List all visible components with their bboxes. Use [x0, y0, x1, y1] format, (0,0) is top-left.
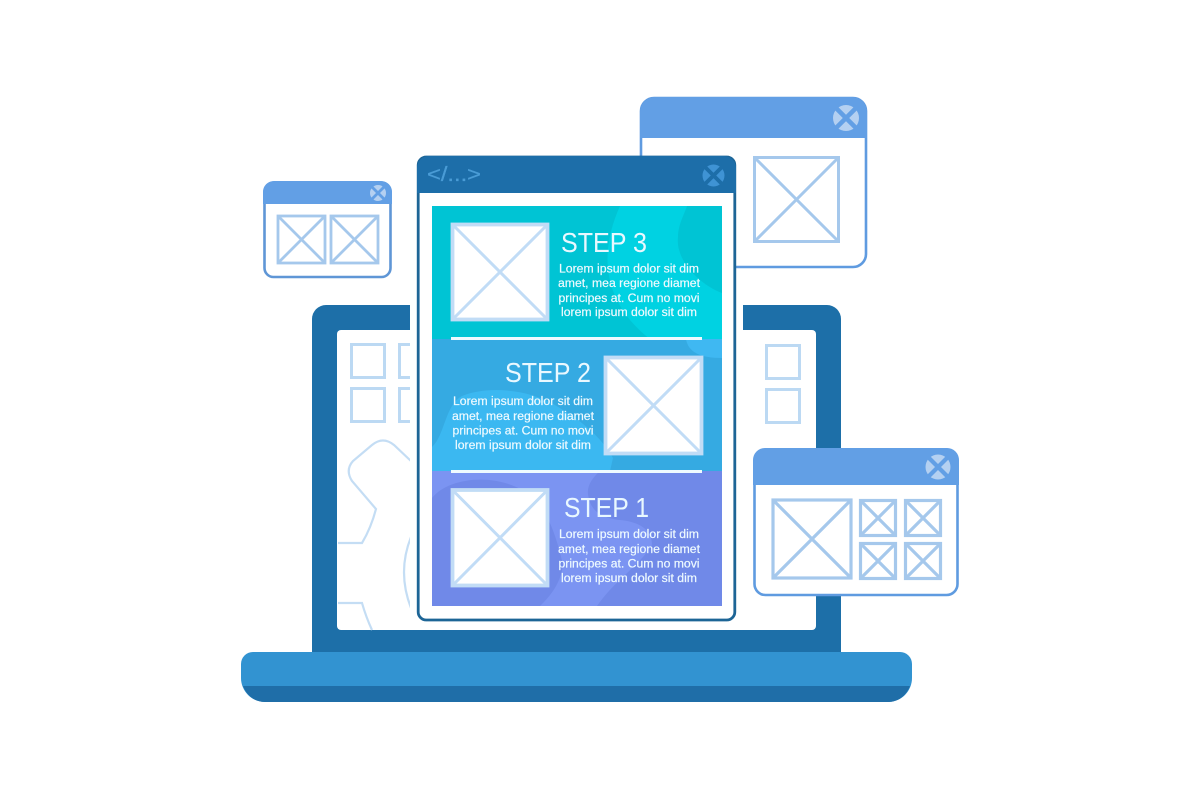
panel shade left	[432, 480, 563, 606]
text block: principes at. Cum no movi	[452, 424, 594, 438]
text block: lorem ipsum dolor sit dim	[561, 305, 697, 319]
laptop	[241, 305, 912, 702]
heading: STEP 3	[561, 227, 647, 258]
white halo	[410, 300, 743, 630]
text block: Lorem ipsum dolor sit dim	[559, 527, 699, 541]
image placeholder	[452, 490, 548, 586]
window header	[263, 181, 392, 204]
laptop screen	[337, 330, 816, 630]
text block	[452, 394, 595, 452]
window: lower right	[753, 448, 959, 595]
text block: Lorem ipsum dolor sit dim	[559, 262, 699, 276]
icon: close button	[702, 164, 724, 186]
laptop base	[241, 652, 912, 702]
heading: STEP 1	[564, 492, 649, 523]
screen gear outline	[338, 440, 412, 630]
panel highlight	[608, 206, 722, 339]
text block: amet, mea regione diamet	[558, 276, 701, 290]
panel shade right	[588, 471, 722, 606]
window header	[753, 448, 959, 485]
image placeholders	[278, 216, 378, 263]
text block: Lorem ipsum dolor sit dim	[453, 394, 593, 408]
text block: lorem ipsum dolor sit dim	[561, 571, 697, 585]
icon: close button	[370, 185, 386, 201]
image placeholders	[773, 500, 940, 578]
window: left small	[263, 181, 392, 277]
text block	[558, 527, 701, 585]
window header	[417, 156, 736, 193]
text block	[558, 262, 701, 319]
image placeholder	[452, 224, 548, 320]
text block: principes at. Cum no movi	[558, 291, 700, 305]
code tag: </...>	[427, 164, 481, 186]
image placeholder	[754, 158, 838, 242]
text block: amet, mea regione diamet	[558, 542, 701, 556]
text block: lorem ipsum dolor sit dim	[455, 438, 591, 452]
icon: close button	[926, 454, 950, 480]
screen wireframe icons	[352, 344, 800, 422]
text block: amet, mea regione diamet	[452, 409, 595, 423]
image placeholder	[606, 358, 702, 454]
heading: STEP 2	[505, 357, 591, 388]
window frame	[418, 157, 735, 620]
window header	[640, 97, 867, 138]
window: top right	[640, 97, 867, 267]
panel highlights	[432, 390, 613, 471]
text block: principes at. Cum no movi	[558, 556, 700, 570]
icon: close button	[833, 105, 859, 131]
panel: step 1	[432, 471, 722, 606]
panel: step 3	[432, 206, 722, 339]
laptop lid	[312, 305, 841, 652]
laptop base lower band	[243, 686, 910, 702]
panel: step 2	[432, 339, 722, 471]
main window	[410, 156, 743, 630]
